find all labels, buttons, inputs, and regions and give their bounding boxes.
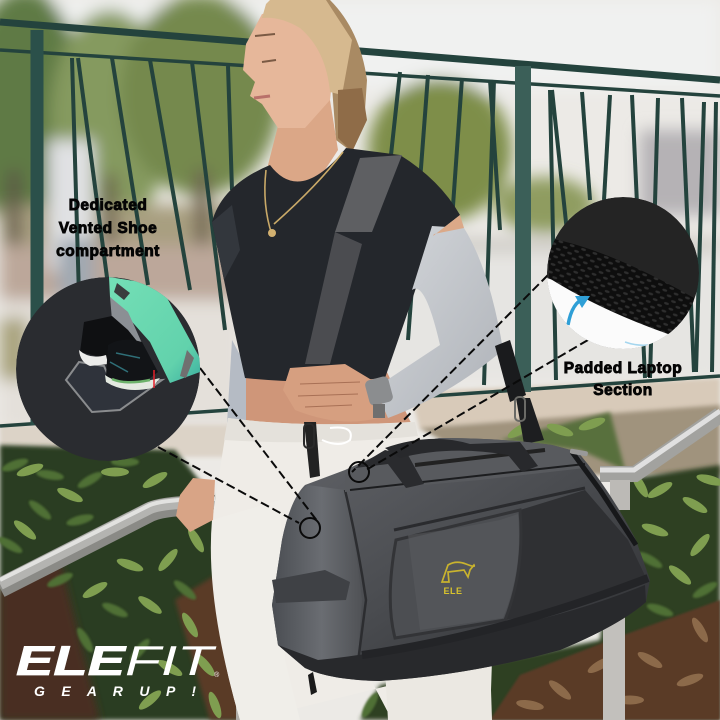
logo: ELEFIT: G E A R U P ! [34,683,196,699]
duffel bag [272,438,650,695]
side pocket strap [272,570,350,603]
bottom edge [278,585,646,681]
open green flap [109,277,202,383]
hand on strap [283,364,385,422]
bottom band [362,578,648,655]
top zipper [350,464,585,490]
tray [66,362,162,412]
woman [176,0,503,720]
logo: ELEFIT: ® [214,671,220,679]
hair top [262,0,352,95]
zip pull [308,672,317,695]
arm sleeve [375,226,503,418]
watch [364,375,394,407]
label: shoe compartment: compartment [56,243,160,260]
label: laptop section: Section [593,382,653,399]
other hand on rail [176,478,215,532]
neck and chest [268,100,338,190]
label: shoe compartment: Vented Shoe [59,220,157,237]
front pocket [390,510,521,638]
label: laptop section [564,360,682,399]
face [243,8,335,128]
label: laptop section: Padded Laptop [564,360,682,377]
top panel [345,438,585,492]
label: shoe compartment: Dedicated [69,197,147,214]
callout marker circles [300,462,369,538]
bag body [272,438,650,681]
right zip [572,452,636,545]
logo: ELEFIT: FIT [125,637,218,684]
blue arrow [566,300,580,326]
metal handrail [0,411,720,720]
front shoe [106,340,158,383]
ELE text: ELE [443,586,463,596]
front dark panel [505,490,648,620]
bushes and bricks [0,412,720,720]
callout: shoe compartment circle [16,277,202,461]
elephant logo [442,562,474,582]
callout: laptop padding circle [545,197,700,350]
green metal fence [0,22,720,426]
mesh band [549,238,694,336]
left sleeve behind [226,340,248,440]
logo: ELEFIT: ELE [16,637,128,684]
shoulder strap [304,155,544,478]
midriff [246,370,412,425]
callout lines [158,275,588,523]
necklace [265,152,343,235]
handles [355,450,424,488]
black shirt [212,148,460,382]
ponytail [300,0,367,152]
rear shoe [80,316,140,360]
label: shoe compartment [56,197,160,260]
logo: ELEFIT [16,637,220,699]
white pants [211,418,492,720]
end panel [272,485,362,668]
